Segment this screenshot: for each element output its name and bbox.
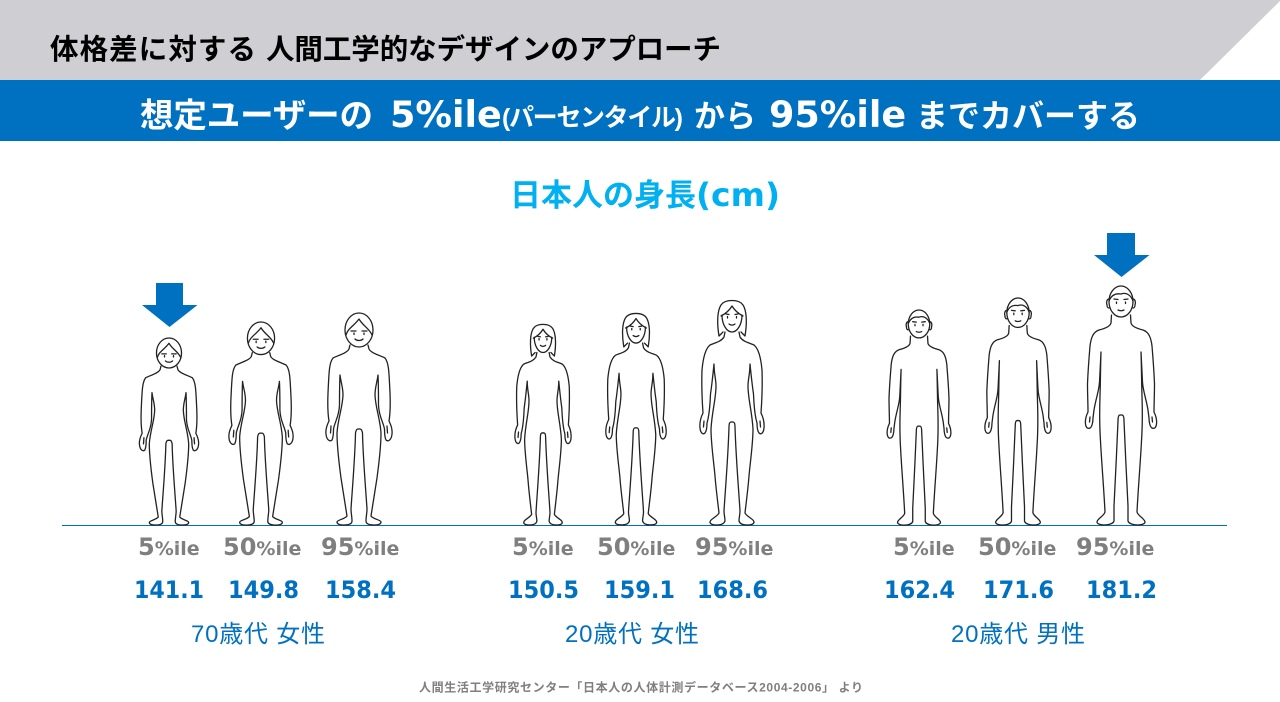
group label: 20s woman: 20歳代 女性	[565, 621, 699, 648]
figure: 70s woman 50%ile	[229, 322, 293, 525]
title: 体格差に対する	[50, 34, 256, 66]
arrow: shortest person	[142, 283, 198, 327]
values: 20s woman: 168.6	[697, 576, 768, 604]
percentile labels: 20s woman	[512, 533, 773, 561]
header band	[0, 0, 1280, 80]
figure: 20s woman 95%ile	[700, 300, 764, 525]
percentile labels: 70s woman: 50%ile	[223, 533, 301, 561]
baseline	[62, 525, 1227, 526]
source note: 人間生活工学研究センター「日本人の人体計測データベース2004-2006」 より	[419, 680, 863, 694]
title: 人間工学的なデザインのアプローチ	[266, 33, 721, 66]
percentile labels: 70s woman	[138, 533, 399, 561]
percentile labels: 70s woman: 95%ile	[321, 533, 399, 561]
banner text: 想定ユーザーの	[140, 98, 373, 135]
percentile labels: 20s man	[893, 533, 1154, 561]
blue banner	[0, 80, 1280, 141]
values: 70s woman: 141.1	[134, 576, 204, 604]
chart heading	[510, 176, 780, 214]
percentile labels: 20s woman: 95%ile	[695, 533, 773, 561]
figure: 20s man 95%ile	[1085, 286, 1157, 525]
percentile labels: 20s man: 50%ile	[978, 533, 1056, 561]
figure: 20s woman 50%ile	[606, 313, 666, 525]
values: 70s woman: 158.4	[325, 576, 396, 604]
values: 70s woman	[134, 576, 396, 604]
banner text: 5%ile	[390, 93, 502, 136]
figure: 20s man 5%ile	[887, 310, 951, 525]
values: 70s woman: 149.8	[228, 576, 299, 604]
values: 20s man: 162.4	[884, 576, 955, 604]
percentile labels: 20s woman: 5%ile	[512, 533, 574, 561]
values: 20s woman: 150.5	[508, 576, 579, 604]
percentile labels: 20s man: 5%ile	[893, 533, 955, 561]
banner text: までカバーする	[916, 98, 1140, 134]
percentile labels: 20s woman: 50%ile	[597, 533, 675, 561]
percentile labels: 70s woman: 5%ile	[138, 533, 200, 561]
banner text: 95%ile	[769, 93, 906, 136]
chart heading: (cm)	[696, 176, 780, 214]
values: 20s woman: 159.1	[604, 576, 675, 604]
figure: 20s woman 5%ile	[515, 324, 571, 525]
chart heading: 日本人の身長	[510, 178, 696, 213]
figure: 70s woman 5%ile	[139, 338, 199, 525]
banner text: (パーセンタイル)	[502, 104, 683, 132]
group label: 70s woman: 70歳代 女性	[191, 621, 325, 648]
figure: 70s woman 95%ile	[326, 313, 392, 525]
arrow: tallest person	[1094, 233, 1150, 277]
values: 20s man	[884, 576, 1157, 604]
values: 20s woman	[508, 576, 768, 604]
figure: 20s man 50%ile	[985, 298, 1051, 525]
percentile labels: 20s man: 95%ile	[1076, 533, 1154, 561]
values: 20s man: 181.2	[1086, 576, 1157, 604]
banner text	[140, 93, 1140, 136]
group label: 20s man: 20歳代 男性	[951, 621, 1085, 648]
banner text: から	[694, 99, 756, 134]
values: 20s man: 171.6	[983, 576, 1054, 604]
